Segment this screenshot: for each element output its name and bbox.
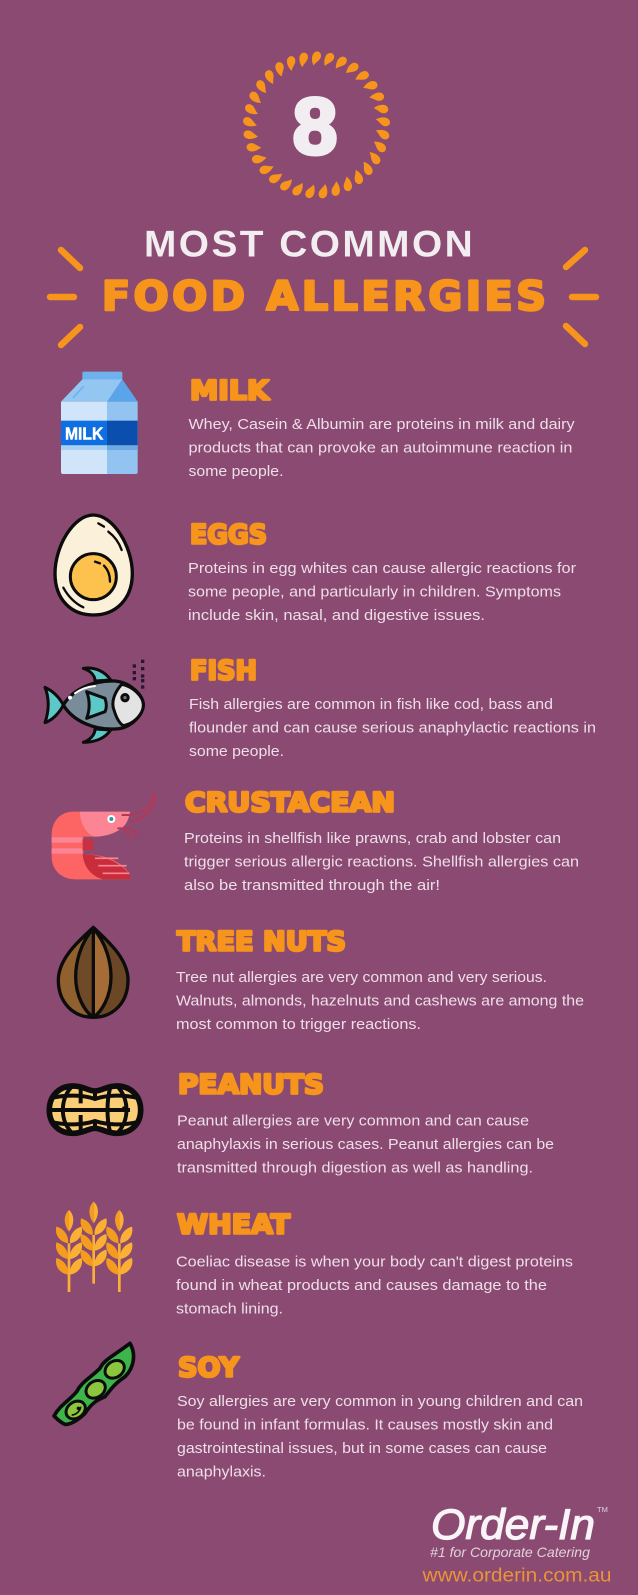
heading: SOY [178, 1353, 240, 1384]
heading: EGGS [190, 520, 267, 551]
description: some people. [188, 463, 284, 480]
description: trigger serious allergic reactions. Shellfish allergies can [184, 854, 579, 870]
left rays [50, 250, 80, 345]
website: www.orderin.com.au [421, 1566, 612, 1586]
description [188, 560, 576, 624]
tagline: #1 for Corporate Catering [430, 1544, 590, 1560]
description: anaphylaxis. [177, 1464, 266, 1480]
right rays [566, 250, 596, 344]
description: include skin, nasal, and digestive issues. [188, 607, 485, 624]
description: Soy allergies are very common in young children and can [177, 1393, 583, 1410]
description: Tree nut allergies are very common and very serious. [176, 969, 547, 986]
icon: soy pod [54, 1343, 134, 1424]
description: some people, and particularly in children. Symptoms [188, 584, 561, 600]
trademark: TM [597, 1505, 608, 1514]
panel: soy [54, 1343, 583, 1480]
description: gastrointestinal issues, but in some cases can cause [177, 1440, 547, 1457]
description: products that can provoke an autoimmune reaction in [188, 440, 572, 456]
panel: crustacean [52, 788, 579, 894]
description: most common to trigger reactions. [176, 1016, 421, 1033]
heading: CRUSTACEAN [185, 788, 395, 819]
description [189, 696, 596, 760]
description: Walnuts, almonds, hazelnuts and cashews are among the [176, 992, 584, 1010]
description [188, 416, 575, 480]
panel: wheat [56, 1202, 573, 1318]
description: found in wheat products and causes damage to the [176, 1277, 547, 1294]
description: Coeliac disease is when your body can't digest proteins [176, 1254, 573, 1270]
icon: fish [45, 660, 144, 742]
description [184, 830, 579, 894]
description [177, 1393, 583, 1480]
description: anaphylaxis in serious cases. Peanut allergies can be [177, 1136, 554, 1153]
description [177, 1112, 554, 1176]
icon: milk carton [61, 372, 138, 474]
panel: fish [45, 656, 596, 760]
logo wordmark: Order-In [431, 1501, 595, 1549]
heading: PEANUTS [178, 1070, 324, 1101]
icon: prawn [52, 793, 155, 879]
heading: WHEAT [177, 1210, 290, 1241]
description: also be transmitted through the air! [184, 877, 440, 894]
icon: boiled egg [55, 515, 132, 615]
number 8: 8 [293, 82, 337, 170]
description: Whey, Casein & Albumin are proteins in milk and dairy [188, 416, 575, 433]
number badge [243, 51, 390, 199]
panel: tree nuts [57, 927, 584, 1033]
description: flounder and can cause serious anaphylactic reactions in [189, 720, 596, 736]
logo: Order-In [421, 1501, 612, 1586]
title line 1: MOST COMMON [144, 224, 473, 265]
icon: milk carton: MILK [65, 423, 104, 443]
description: Fish allergies are common in fish like cod, bass and [189, 696, 553, 713]
icon: tree nut [57, 927, 129, 1018]
description: some people. [189, 743, 284, 760]
description [176, 969, 584, 1033]
description: transmitted through digestion as well as handling. [177, 1160, 533, 1176]
panel: peanuts [48, 1070, 554, 1176]
heading: MILK [190, 376, 271, 407]
description: stomach lining. [176, 1300, 283, 1318]
title line 2: FOOD ALLERGIES [102, 273, 546, 320]
description: Proteins in shellfish like prawns, crab and lobster can [184, 830, 561, 847]
petal ring [243, 51, 390, 199]
panel: milk [61, 372, 575, 480]
icon: wheat [56, 1202, 132, 1292]
heading: FISH [190, 656, 257, 687]
panel: eggs [55, 515, 576, 624]
description [176, 1254, 573, 1318]
description: be found in infant formulas. It causes mostly skin and [177, 1416, 553, 1434]
description: Proteins in egg whites can cause allergic reactions for [188, 560, 576, 577]
icon: peanut [48, 1085, 141, 1134]
heading: TREE NUTS [177, 927, 346, 958]
description: Peanut allergies are very common and can cause [177, 1112, 529, 1130]
